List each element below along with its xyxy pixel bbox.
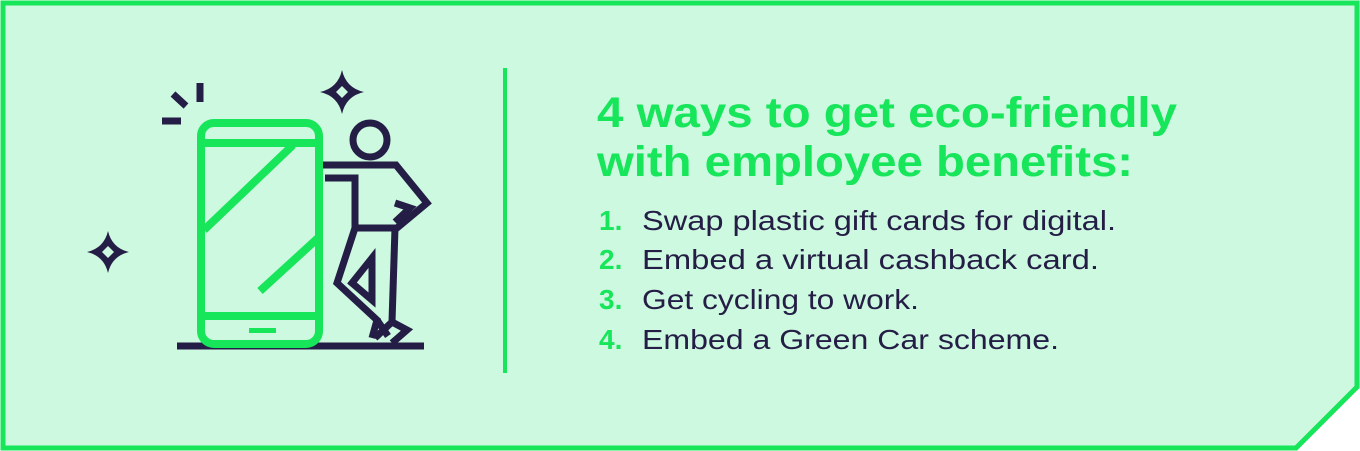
divider	[503, 68, 507, 373]
item 2: Embed a virtual cashback card.	[642, 244, 1099, 275]
item 3: 3.	[599, 284, 622, 315]
item 4: Embed a Green Car scheme.	[642, 324, 1059, 355]
ground line	[177, 342, 424, 350]
item 1: 1.	[599, 205, 622, 236]
title	[596, 89, 1177, 186]
icon: sparkle left	[87, 231, 129, 273]
icon: shine dashes	[162, 83, 200, 121]
item 1: Swap plastic gift cards for digital.	[642, 205, 1116, 236]
item 3: Get cycling to work.	[642, 284, 919, 315]
list of ways	[599, 205, 1116, 355]
illustration: phone and person	[87, 70, 427, 346]
item 2: 2.	[599, 244, 622, 275]
person	[323, 123, 427, 343]
icon: sparkle top	[320, 70, 364, 114]
title: 4 ways to get eco-friendly	[597, 89, 1177, 137]
item 4: 4.	[599, 324, 622, 355]
phone	[201, 123, 319, 344]
title: with employee benefits:	[596, 138, 1133, 186]
